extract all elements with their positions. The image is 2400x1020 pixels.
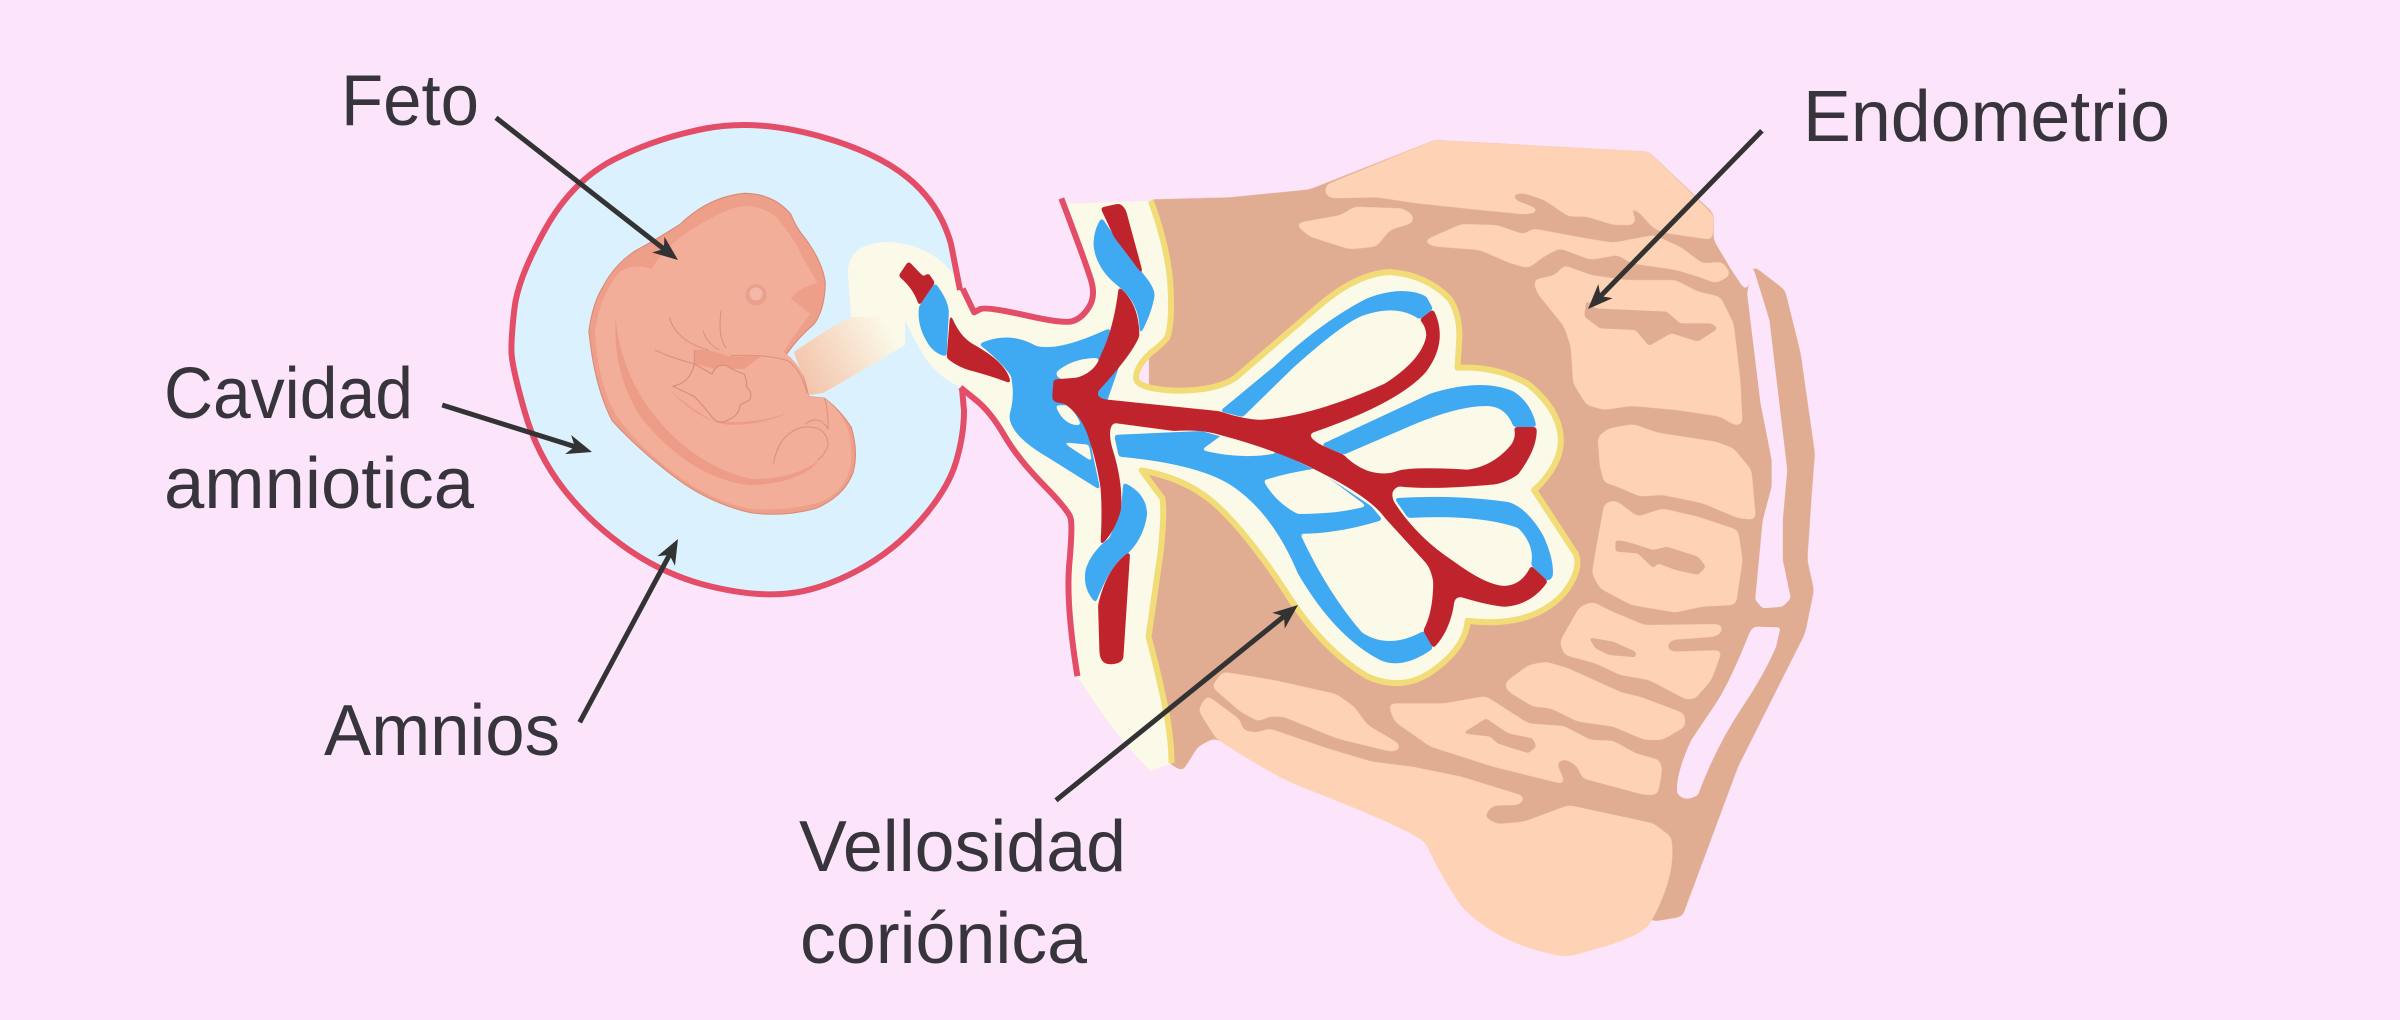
- arrow: Cavidad amniotica: [439, 396, 595, 462]
- label: Feto: Feto: [341, 61, 479, 141]
- embryo hand: [673, 364, 751, 422]
- panel: umbilical cord and embryo: [589, 193, 905, 514]
- embryo lighter interior: [595, 206, 851, 510]
- panel: endometrium tissue: [1149, 140, 1815, 956]
- embryo: [589, 193, 855, 514]
- arrow: Feto: [490, 110, 684, 268]
- label: Cavidad amniotica: [164, 354, 475, 524]
- embryo body: [589, 193, 855, 514]
- label: Endometrio: Endometrio: [1803, 77, 2170, 157]
- label: Vellosidad corionica: Vellosidad: [799, 807, 1126, 887]
- label: Cavidad amniotica: amniotica: [164, 444, 475, 524]
- umbilical cord: [794, 316, 905, 395]
- embryo eye: [745, 284, 767, 306]
- embryo shading: [615, 317, 819, 485]
- amnion membrane outline: [511, 125, 1093, 676]
- chorion cream tissue: [848, 198, 1577, 771]
- embryo creases: [655, 310, 828, 464]
- arrow: Endometrio: [1581, 124, 1769, 316]
- amniotic cavity fill: [511, 125, 975, 594]
- arrow: Amnios: [571, 534, 687, 727]
- blue vessels: [919, 217, 1553, 663]
- label: Cavidad amniotica: Cavidad: [164, 354, 413, 434]
- inner gland details: [1462, 300, 1718, 753]
- label: Vellosidad corionica: coriónica: [800, 899, 1088, 979]
- endometrium base layer: [1149, 140, 1815, 922]
- red vessels: [898, 204, 1548, 664]
- cream gaps between vessels: [1055, 358, 1367, 514]
- label: Vellosidad corionica: [799, 807, 1126, 979]
- glandular lobes: [1198, 140, 1756, 956]
- yellow chorion border: [1136, 201, 1577, 763]
- gaps in the outer wall: [1677, 265, 1791, 799]
- arrow: Vellosidad corionica: [1050, 597, 1304, 808]
- panel: chorionic villus: [848, 198, 1577, 771]
- label: Amnios: Amnios: [324, 691, 560, 771]
